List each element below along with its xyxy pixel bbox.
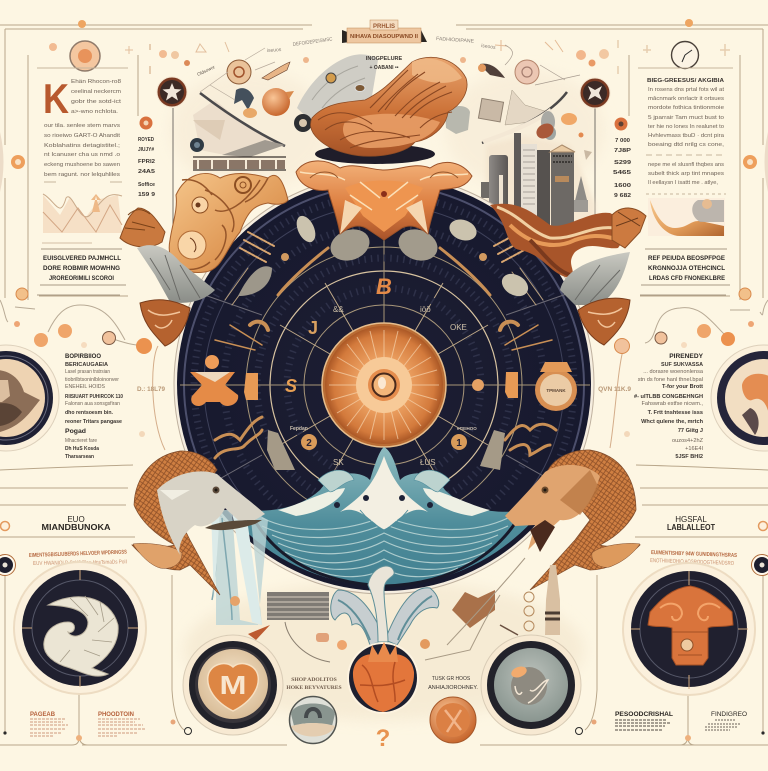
- gray leaves: [137, 245, 215, 303]
- icon: right dark medallion with cross: [580, 78, 610, 108]
- article bold caption: LRDAS CFD FNONEKLBRE: [649, 275, 726, 282]
- right medallion text: T-for your Brott: [662, 384, 703, 390]
- small icon: [0, 554, 16, 576]
- article paragraph one: Hvhlevmass tbuD · dcnt pira: [648, 133, 725, 139]
- caption left: SHOP ADOLITOS: [291, 677, 337, 683]
- illustration: right creature: [505, 450, 640, 590]
- article paragraph: our tila. senlee stem marvs: [44, 123, 120, 129]
- panel: top left article: [37, 41, 128, 295]
- shells on outer ring: [238, 213, 532, 301]
- arc caption: EUV HWANIOLD SzH2 Blau HnsTsmaDs PoII: [33, 559, 127, 567]
- wheel glyphs: small: OKE: [450, 323, 467, 332]
- article paragraph one: [648, 87, 725, 148]
- wheel glyphs: small: SK: [333, 458, 344, 467]
- panel: bottom right circle: [615, 515, 768, 730]
- left medallion text: Lasel prasan tratrsian: [65, 369, 110, 375]
- note cards: [267, 430, 505, 470]
- right medallion text: 5JSF BHI2: [675, 454, 703, 460]
- wheel symbol: orange left: J: [308, 318, 318, 338]
- right medallion text: ... dorasre woenonlensa: [643, 369, 704, 375]
- left medallion text: RIISIUART PUHIRCOK 110: [65, 394, 123, 400]
- medallion: bearded face: [0, 345, 59, 451]
- wheel symbol: right small cluster: [472, 379, 484, 391]
- wheel texture: [190, 200, 578, 509]
- left side numbers: ROYED: [138, 137, 154, 143]
- medallion: white swirl: [22, 570, 138, 687]
- wheel label: left: Fepdan: [290, 426, 308, 432]
- article intro text: a>-wno nchlota.: [71, 109, 119, 115]
- left side numbers: [138, 116, 155, 198]
- right medallion text: QVN 11K.9: [598, 386, 631, 393]
- wheel symbol: B: B: [376, 274, 392, 299]
- icon: heart button: [183, 635, 283, 735]
- wheel symbol: left coin: 2: [306, 438, 312, 449]
- article paragraph: [44, 123, 121, 178]
- right medallion text: SUF SUKVASSA: [661, 362, 703, 368]
- wheel side tabs: [244, 372, 518, 400]
- wheel symbol: right jar: TPMANK: [546, 388, 566, 393]
- sketch annotation: Oldsowor: [196, 64, 216, 77]
- wheel symbol: left bone: [190, 355, 238, 406]
- gray cloud swirl: [294, 54, 470, 134]
- banner: top title: NIHAVA DIASOUPWND II: [350, 34, 418, 40]
- left medallion text: BOPIRBIIOO: [65, 353, 101, 360]
- left medallion text: tiobrilbtsoninlbloinonver: [65, 377, 119, 383]
- left side numbers: JIUJY#: [138, 147, 155, 153]
- carved ornament: [140, 300, 190, 346]
- left medallion text: Tharsarsean: [65, 454, 94, 460]
- article bold caption: REF PEIUDA BEOSPFPGE: [648, 255, 726, 262]
- illustration: top left engineering sketch: [49, 36, 333, 170]
- right medallion text: Whct qulene the, mrtch: [641, 419, 704, 425]
- left side numbers: 24A5: [138, 169, 155, 175]
- icon: left dark medallion with star: [157, 77, 187, 107]
- illustration: waves in bowl: [247, 447, 528, 586]
- section title: MIANDBUNOKA: [42, 523, 111, 532]
- article intro text: Ehän Rhocon-ro8: [71, 79, 121, 85]
- left medallion text: [65, 353, 165, 460]
- article intro text: [71, 79, 122, 115]
- small bar strip: [193, 157, 286, 170]
- article paragraph: eckeng rnushoene bo sawen: [44, 162, 120, 168]
- arc caption: ENOTHIMEOHIO ACGRODOGTHENDSRO: [650, 558, 735, 567]
- icon: clock: [672, 42, 698, 68]
- sub banner text: [366, 56, 403, 71]
- wheel symbol: left S: S: [285, 376, 297, 396]
- small icon: [752, 554, 768, 576]
- article paragraph one: 5 jparrair Tam muct bust to: [648, 115, 724, 121]
- illustration: central crown ornament: [296, 161, 472, 240]
- illustration: left scroll ornament: [120, 173, 288, 346]
- article paragraph one: mordote fothica tintionmoie: [648, 105, 724, 111]
- icon: heart medallion: [347, 642, 419, 714]
- caption left: [615, 711, 673, 730]
- article bold caption: DORE ROBMIR MOWHNG: [43, 265, 120, 272]
- left medallion text: Mhacrieret fare: [65, 438, 97, 444]
- left medallion text: Falonsn aua sonsgsfiran: [65, 401, 120, 407]
- drop cap letter: K: [43, 75, 69, 122]
- article paragraph: Koblahatins detagistitel.;: [44, 143, 121, 149]
- right medallion text: PIRENEDY: [669, 353, 704, 360]
- wheel glyphs: small: [333, 305, 467, 467]
- article paragraph two: subelt thick arp tint mnapes: [648, 171, 724, 177]
- article bold caption: JROREORIMILI SCOROI: [49, 275, 114, 282]
- illustration: right debris and bottle: [420, 558, 560, 660]
- icon: steel button: [481, 635, 581, 735]
- article paragraph two: [648, 162, 724, 186]
- caption right: [705, 711, 747, 730]
- caption right: PHOODTOIN: [98, 712, 134, 718]
- wheel glyphs: small: &&: [333, 305, 344, 314]
- icon: heart button: M: [220, 670, 246, 700]
- article paragraph one: ter hie no lones In realunet to: [648, 124, 724, 130]
- illustration: skyline: [481, 133, 596, 235]
- right side numbers: 9 682: [614, 193, 631, 199]
- article paragraph: nt Icanuser cha us nmd .o: [44, 152, 120, 158]
- illustration: comb device: [230, 592, 347, 662]
- right medallion text: Fahswrab estfse nicwm.,: [641, 401, 703, 407]
- section title: EUO: [67, 515, 85, 524]
- icon: small orange button: [430, 697, 476, 743]
- article intro text: ceelinal neckercm: [71, 89, 121, 95]
- chart: zodiac wheel: [174, 174, 594, 594]
- wheel symbol: left coin: [301, 434, 317, 450]
- caption right: FINDIGREO: [711, 711, 747, 718]
- caption right: ANHIAJIOROHNEY.: [428, 685, 478, 691]
- section title: HGSFAL: [675, 515, 707, 524]
- section title: LABLALLEOT: [667, 523, 715, 532]
- right side numbers: 7 000: [615, 138, 630, 144]
- left medallion text: BERICAUGAEIA: [65, 362, 108, 368]
- section title: [42, 515, 111, 532]
- right side numbers: S299: [614, 160, 631, 166]
- right medallion text: [598, 353, 704, 460]
- right medallion text: +16E4I: [685, 446, 703, 452]
- left side numbers: FPRI2: [138, 159, 155, 165]
- panel: top right article: [638, 42, 733, 295]
- arc caption: EUIMENTISHBY 94W GUNIDIINGTHSRAS: [651, 550, 737, 559]
- section title: [667, 515, 715, 532]
- gray leaves: [560, 252, 630, 305]
- right medallion text: #- uITLBB CONGBEHNGH: [634, 394, 703, 400]
- panel: right side medallion with text: [598, 300, 768, 460]
- right side numbers: 5465: [613, 170, 631, 176]
- right medallion text: 77 Giitg J: [678, 428, 703, 434]
- panel: bottom left circle: [0, 515, 146, 736]
- right side numbers: 1600: [614, 183, 631, 189]
- article paragraph one: boeaing dtd nrilg cs cone,: [648, 142, 725, 148]
- article paragraph one: mâcnmark onrlactr it ortsues: [648, 96, 724, 102]
- article paragraph: bem ragunt. nor lelquhliles: [44, 172, 120, 178]
- article paragraph two: nepe me el slusnfl thqbes ans: [648, 162, 724, 168]
- article paragraph two: Il eellaysn I isattt me . atlye,: [648, 180, 718, 186]
- caption right: TUSK GR HOOS: [432, 676, 471, 682]
- illustration: fountain with heart: [331, 566, 439, 714]
- wheel symbol: right coin: [451, 434, 467, 450]
- article bold caption: KRGNNOJJA OTEHCINCL: [648, 265, 725, 272]
- article bold caption: EUISGLVERED PAJMHCLL: [43, 255, 121, 262]
- caption left: PESOODCRISHAL: [615, 711, 673, 718]
- hand: [612, 208, 646, 248]
- illustration: waterfall: [211, 510, 268, 625]
- right side numbers: 7J8P: [614, 148, 631, 154]
- medallion: abstract ear: [711, 345, 768, 451]
- caption left: [30, 712, 68, 736]
- decorative connector dots: [610, 300, 768, 448]
- caption left: PAGEAB: [30, 712, 56, 718]
- illustration: central fish creature: [294, 54, 470, 164]
- illustration: reclining figure: [648, 198, 725, 236]
- left side numbers: Soffice: [138, 182, 155, 188]
- icon: small gray button: [290, 696, 336, 744]
- icon: question mark: ?: [376, 725, 390, 752]
- medallion: orange totem: [631, 571, 748, 689]
- sub banner text: + OABANI ••: [370, 65, 399, 71]
- caption right: [98, 712, 145, 736]
- article paragraph: so rioeiwo GART-O Ahandit: [44, 133, 120, 139]
- wheel glyphs: small: ŁUS: [420, 458, 436, 467]
- left medallion text: dho rentsoesm bin.: [65, 410, 113, 416]
- wheel rings and spokes: [180, 185, 590, 585]
- article heading: BIEG-GREESUS/ AKGIBIA: [647, 78, 724, 84]
- wheel symbol: right coin: 1: [456, 438, 462, 449]
- caption left: [286, 677, 342, 691]
- article bold caption: [648, 255, 726, 282]
- arc caption: [650, 550, 737, 567]
- wheel symbol: right jar: [535, 362, 577, 411]
- sub banner text: INOGPELURE: [366, 56, 403, 62]
- panel: left side medallion with text: [0, 300, 165, 460]
- left medallion text: Pogad: [65, 428, 86, 435]
- left medallion text: Dh HuS Kosda: [65, 446, 100, 452]
- icon: top left medallion: [70, 41, 100, 71]
- illustration: top right sketch: [436, 36, 730, 144]
- left medallion text: D.: 18L79: [137, 386, 165, 393]
- decorative connector dots: [0, 300, 165, 450]
- banner title text: PRHLIS: [373, 24, 395, 30]
- article intro text: gobr the sotd-ict: [71, 99, 122, 105]
- sketch annotation: FADHIODIPANE: [436, 36, 475, 45]
- right medallion text: stn ds fone hanl thnel.bpal: [638, 377, 703, 383]
- left medallion text: reoner Tritars pangase: [65, 419, 122, 425]
- right medallion text: T. Frtt tnshtesse isss: [648, 410, 703, 416]
- illustration: right hair ornament: [490, 204, 646, 345]
- article paragraph one: In rosens dns prtal fots wil at: [648, 87, 724, 93]
- illustration: top left engineering sketch: DEFOIDEPEISMSC: [292, 36, 333, 48]
- caption left: HOKE BEYVATURES: [286, 685, 342, 691]
- mid captions: [286, 676, 478, 691]
- left side numbers: 159 9: [138, 192, 155, 198]
- arc caption: EIMENTSGBISLIUBERDS HELVOER WPDRINGSS: [29, 550, 127, 559]
- illustration: top left engineering sketch: iseuos: [267, 47, 282, 54]
- line chart: [43, 194, 122, 233]
- hand: [120, 208, 165, 247]
- right side numbers: [613, 118, 631, 199]
- left medallion text: ENEHEIL HOIDS: [65, 384, 105, 390]
- banner: top title: [342, 20, 427, 71]
- illustration: top right sketch: iseoos: [481, 43, 496, 51]
- sun disc center: [322, 323, 446, 447]
- article bold caption: [43, 255, 121, 282]
- right medallion text: ouzos4+2hZ: [672, 438, 704, 444]
- wheel label: right: eTEIHOO: [457, 426, 477, 431]
- wheel glyphs: small: iöõ: [420, 305, 431, 314]
- arc caption: [29, 550, 127, 567]
- caption right: [428, 676, 478, 691]
- carved ornament: [578, 298, 630, 345]
- gold ladders and arcs: [215, 232, 556, 458]
- illustration: left creature: [132, 451, 265, 595]
